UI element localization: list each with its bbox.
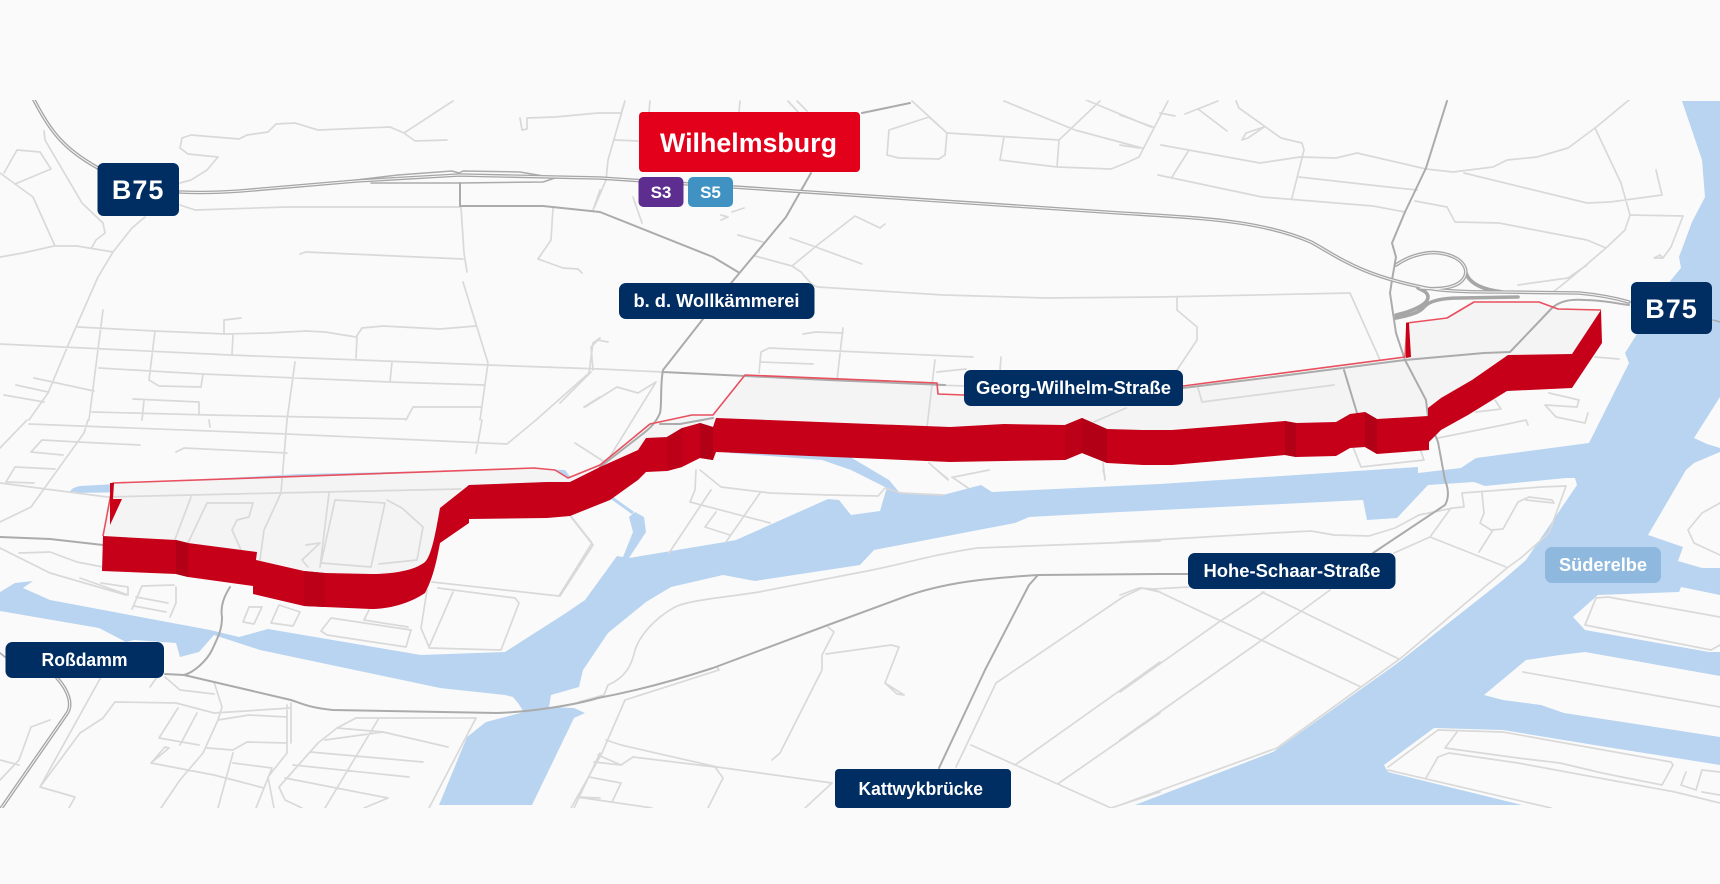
main roads <box>0 101 1629 768</box>
label: Georg-Wilhelm-Straße <box>964 370 1183 406</box>
darker facets of barrier <box>176 412 1377 577</box>
label: Hohe-Schaar-Straße <box>1188 553 1396 589</box>
badge: S3: S3 <box>651 183 671 202</box>
label: B75 east: B75 <box>1645 294 1698 324</box>
badge: S5: S5 <box>700 183 721 202</box>
label: Hohe-Schaar-Straße: Hohe-Schaar-Straße <box>1204 561 1380 581</box>
badge: S3 <box>638 177 684 207</box>
label: B75 west <box>98 163 179 216</box>
project area surface <box>114 469 573 492</box>
label: Kattwykbrücke: Kattwykbrücke <box>858 779 983 799</box>
land: east bank and islands <box>1384 397 1720 810</box>
label: Roßdamm: Roßdamm <box>42 650 128 670</box>
station label: Wilhelmsburg: Wilhelmsburg <box>660 128 837 158</box>
thin red outline of project area <box>103 302 1601 536</box>
water label: Süderelbe: Süderelbe <box>1559 555 1647 575</box>
label: B75 west: B75 <box>112 175 164 205</box>
label: B75 east <box>1631 282 1712 334</box>
label: Kattwykbrücke <box>835 769 1011 808</box>
badge: S5 <box>688 177 733 207</box>
label: b. d. Wollkämmerei <box>619 283 814 319</box>
label: b. d. Wollkämmerei: b. d. Wollkämmerei <box>634 291 800 311</box>
label: Roßdamm <box>6 642 164 678</box>
red back wall pieces <box>110 323 1411 525</box>
red 3D noise barrier band <box>102 310 1602 609</box>
water label: Süderelbe <box>1545 547 1661 583</box>
label: Georg-Wilhelm-Straße: Georg-Wilhelm-Straße <box>976 378 1171 398</box>
station label: Wilhelmsburg <box>639 112 860 172</box>
water: Elbe, canals and harbour basins <box>0 101 1720 805</box>
